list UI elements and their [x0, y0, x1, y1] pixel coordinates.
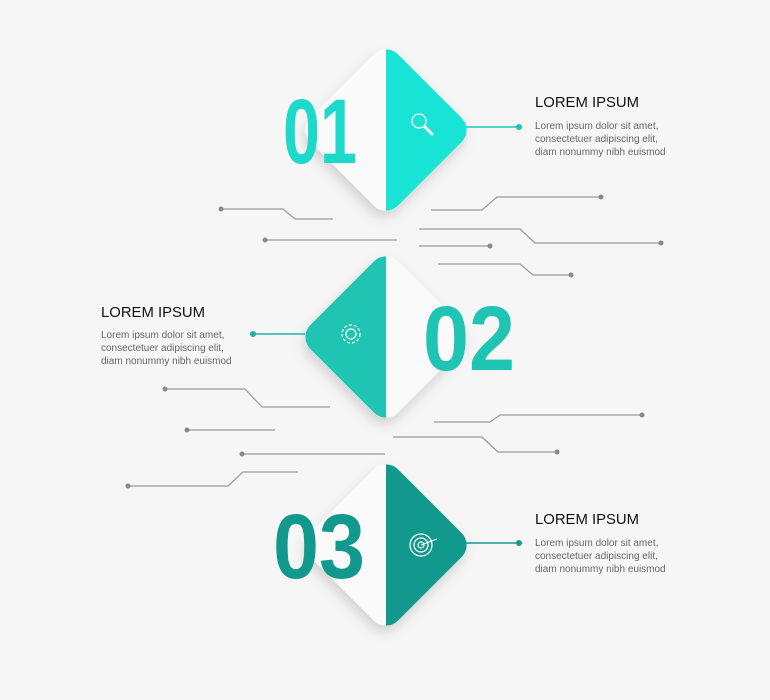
text 3: consectetuer adipiscing elit, [535, 551, 658, 562]
connector [466, 124, 522, 130]
icon: gear [342, 325, 360, 343]
diamond 3 [298, 457, 474, 633]
circuit lines [126, 194, 664, 488]
text 3: Lorem ipsum dolor sit amet, [535, 538, 658, 549]
step 3 [273, 457, 666, 633]
diamond 2 [298, 249, 474, 425]
number 03: 03 [273, 496, 365, 598]
text 3: LOREM IPSUM [535, 511, 639, 528]
connector [250, 331, 305, 337]
step 2 [101, 249, 515, 425]
text 3: diam nonummy nibh euismod [535, 564, 666, 575]
number 02: 02 [423, 288, 515, 390]
text 1: consectetuer adipiscing elit, [535, 134, 658, 145]
icon: magnifier [412, 114, 433, 135]
text 1 [535, 94, 666, 158]
text 2 [101, 304, 232, 367]
number 01: 01 [283, 81, 357, 183]
text 2: Lorem ipsum dolor sit amet, [101, 330, 224, 341]
diamond 1 [298, 42, 474, 218]
text 1: LOREM IPSUM [535, 94, 639, 111]
text 1: diam nonummy nibh euismod [535, 147, 666, 158]
text 2: consectetuer adipiscing elit, [101, 343, 224, 354]
text 3 [535, 511, 666, 575]
step 1 [283, 42, 666, 218]
text 2: diam nonummy nibh euismod [101, 356, 232, 367]
text 1: Lorem ipsum dolor sit amet, [535, 121, 658, 132]
connector [466, 540, 522, 546]
text 2: LOREM IPSUM [101, 304, 205, 321]
icon: target [410, 534, 437, 556]
